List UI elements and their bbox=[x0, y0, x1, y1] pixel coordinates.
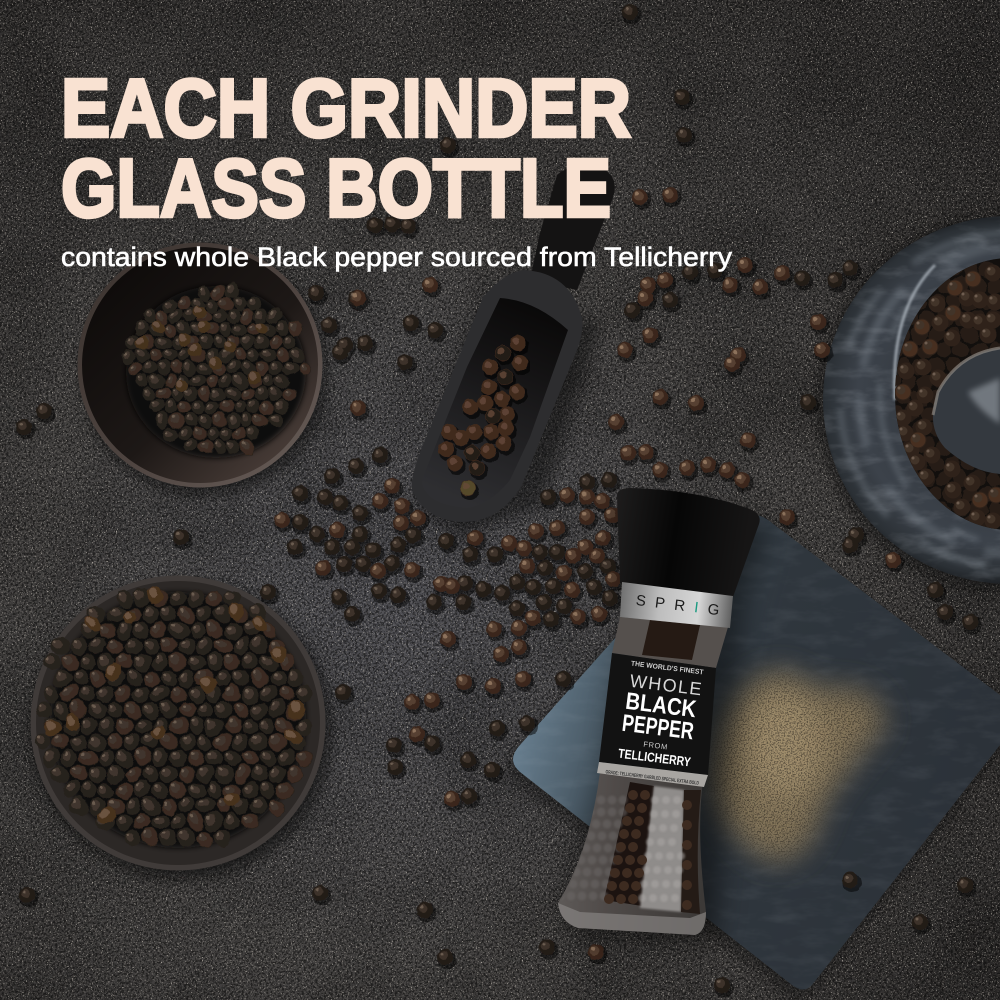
mortar and pestle bbox=[820, 216, 1000, 590]
scoop bbox=[412, 165, 615, 536]
label text: THE WORLD'S FINEST bbox=[631, 661, 705, 677]
pestle bbox=[933, 348, 1000, 474]
title bbox=[61, 62, 631, 234]
bowl of peppercorns bbox=[78, 242, 326, 494]
upper glass bbox=[612, 617, 728, 668]
grinder cap bbox=[617, 488, 760, 597]
black product label bbox=[597, 653, 716, 787]
slate board bbox=[510, 515, 1000, 996]
subtitle: contains whole Black pepper sourced from Tellicherry bbox=[61, 242, 733, 272]
label text bbox=[605, 661, 705, 787]
scoop handle bbox=[530, 165, 615, 290]
silver band bbox=[620, 582, 733, 628]
label text: TELLICHERRY bbox=[617, 746, 692, 769]
label text: BLACK bbox=[624, 688, 698, 723]
mortar bowl bbox=[823, 216, 1000, 584]
grinder bottle bbox=[558, 488, 770, 946]
brand name: SPR I G bbox=[635, 592, 720, 619]
scoop peppercorns bbox=[444, 341, 522, 491]
label text: FROM bbox=[643, 740, 668, 751]
title: EACH GRINDER bbox=[61, 62, 631, 154]
lower glass body bbox=[558, 772, 706, 935]
scoop well bbox=[422, 298, 568, 508]
ground pepper powder bbox=[712, 672, 885, 860]
label text: WHOLE bbox=[629, 671, 703, 699]
peppercorns in mortar bbox=[885, 269, 1000, 526]
peppercorns on plate bbox=[39, 592, 311, 848]
scoop body bbox=[412, 270, 582, 522]
plate of peppercorns bbox=[30, 576, 330, 878]
label text: GRADE: TELLICHERRY GARBLED SPECIAL EXTRA BOLD bbox=[605, 769, 699, 787]
title: GLASS BOTTLE bbox=[61, 142, 611, 234]
peppercorns in bowl bbox=[125, 286, 306, 458]
label text: PEPPER bbox=[621, 710, 695, 745]
